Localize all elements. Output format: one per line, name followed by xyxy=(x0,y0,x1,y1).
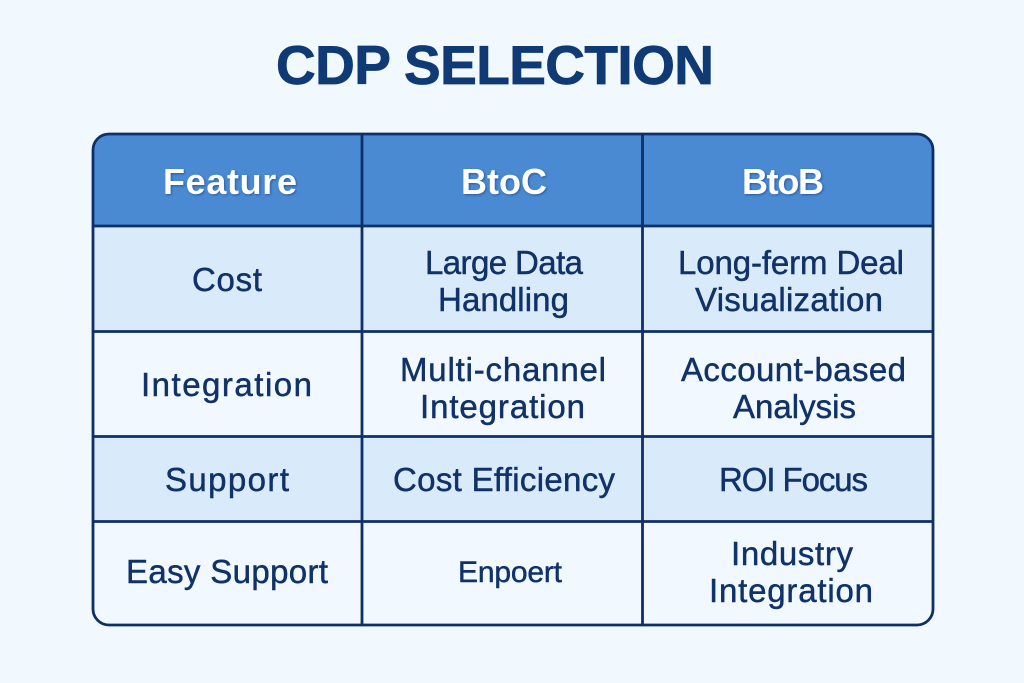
row 2 BtoC: Multi-channel Integration: Multi-channel xyxy=(400,351,606,388)
row 2 feature: Integration: Integration xyxy=(141,366,312,403)
row 4 feature: Easy Support: Easy Support xyxy=(126,553,328,590)
row 1 background xyxy=(93,226,933,331)
row 1 BtoC: Large Data Handling: Large Data xyxy=(425,244,584,281)
header row background xyxy=(93,134,933,226)
row 4 BtoC: Enpoert: Enpoert xyxy=(458,556,563,589)
row 1 BtoC: Large Data Handling xyxy=(425,244,584,318)
comparison table xyxy=(93,134,933,625)
row 2 BtoC: Multi-channel Integration xyxy=(400,351,606,425)
row 3 BtoC: Cost Efficiency: Cost Efficiency xyxy=(393,461,616,498)
header: BtoB: BtoB xyxy=(742,161,824,202)
row 1 BtoB: Long-ferm Deal Visualization xyxy=(678,244,904,318)
row 1 feature: Cost: Cost xyxy=(192,261,262,298)
row 3 feature: Support: Support xyxy=(165,461,289,498)
header: BtoC: BtoC xyxy=(461,161,547,202)
row 4 background xyxy=(93,521,933,625)
row 1 BtoB: Long-ferm Deal Visualization: Visualization xyxy=(695,281,883,318)
table grid lines xyxy=(93,134,933,625)
row 4 BtoB: Industry Integration xyxy=(709,535,873,609)
row 4 BtoB: Industry Integration: Industry xyxy=(731,535,854,572)
row 2 BtoB: Account-based Analysis: Analysis xyxy=(733,388,856,425)
header: Feature: Feature xyxy=(163,161,297,202)
row 1 BtoB: Long-ferm Deal Visualization: Long-ferm Deal xyxy=(678,244,904,281)
row 3 background xyxy=(93,436,933,521)
title: CDP SELECTION xyxy=(276,34,714,96)
row 1 BtoC: Large Data Handling: Handling xyxy=(438,281,569,318)
row 2 BtoB: Account-based Analysis xyxy=(681,351,906,425)
row 2 background xyxy=(93,331,933,436)
row 2 BtoB: Account-based Analysis: Account-based xyxy=(681,351,906,388)
row 3 BtoB: ROI Focus: ROI Focus xyxy=(719,461,868,498)
row 2 BtoC: Multi-channel Integration: Integration xyxy=(420,388,585,425)
row 4 BtoB: Industry Integration: Integration xyxy=(709,572,873,609)
